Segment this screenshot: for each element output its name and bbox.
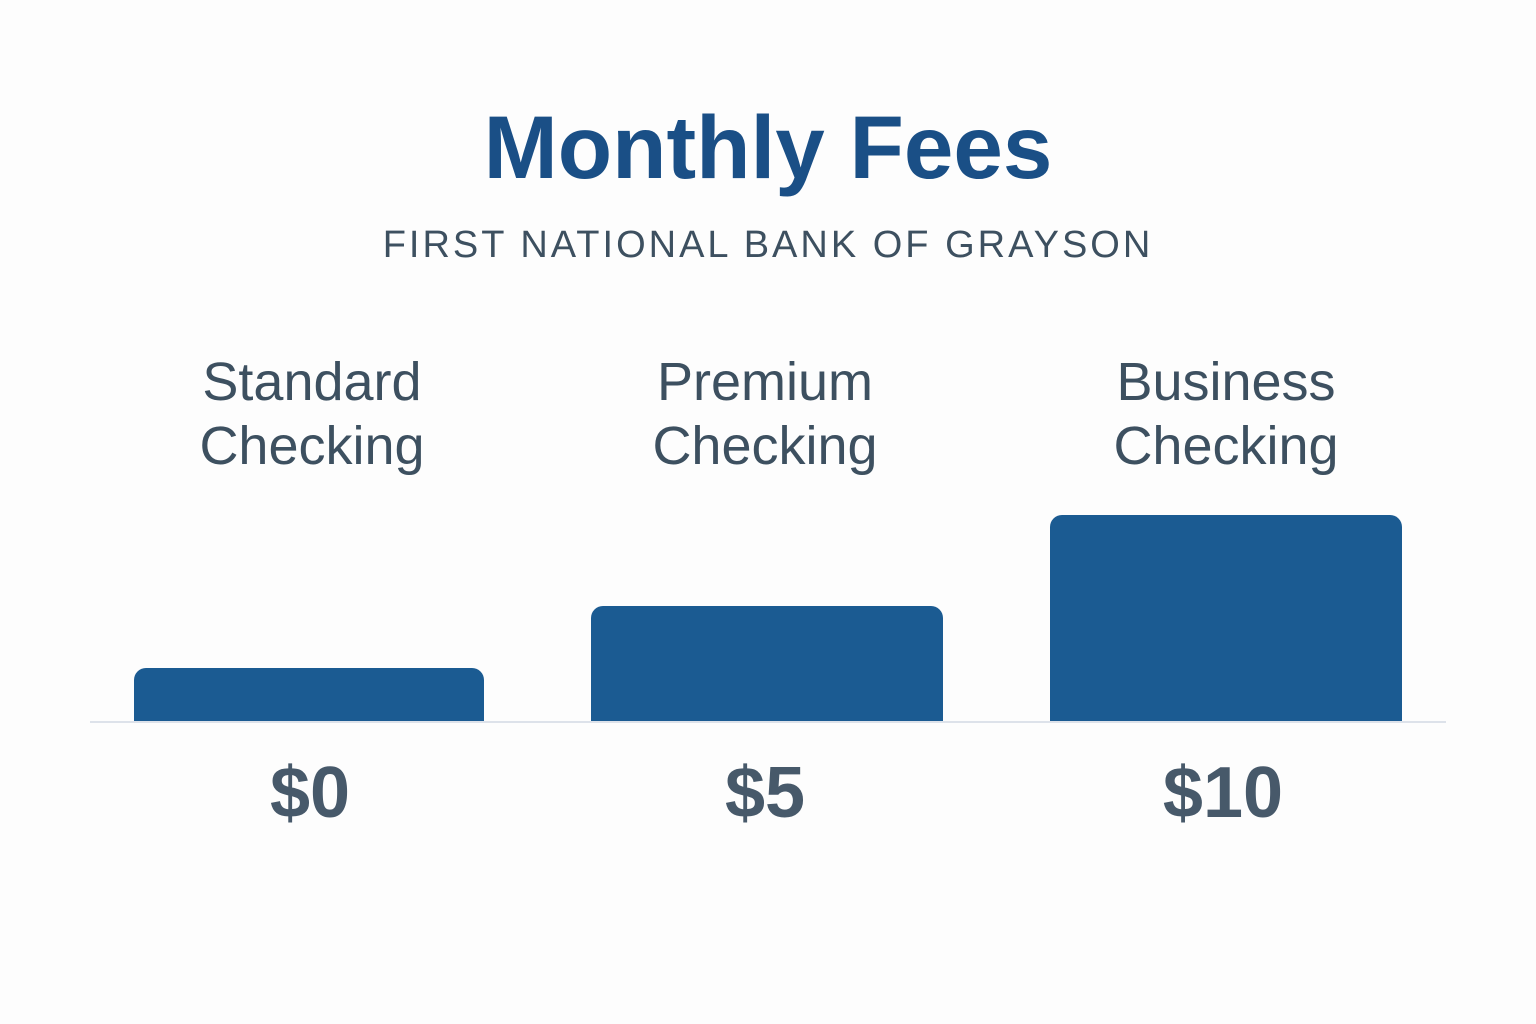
value: premium: $5 (725, 753, 805, 833)
title: Monthly Fees (484, 97, 1052, 197)
label: business: Business (1116, 352, 1336, 412)
label: premium: Premium (657, 352, 873, 412)
label: standard (199, 352, 425, 476)
label: premium (652, 352, 878, 476)
subtitle: FIRST NATIONAL BANK OF GRAYSON (383, 224, 1153, 266)
value: business: $10 (1163, 753, 1283, 833)
label: standard: Standard (202, 352, 422, 412)
label: premium: Checking (652, 416, 878, 476)
chart (90, 352, 1446, 833)
label: standard: Checking (199, 416, 425, 476)
bar: business (1050, 515, 1402, 722)
bar: standard (134, 668, 484, 722)
bar: premium (591, 606, 943, 722)
label: business: Checking (1113, 416, 1339, 476)
value: standard: $0 (270, 753, 350, 833)
label: business (1113, 352, 1339, 476)
